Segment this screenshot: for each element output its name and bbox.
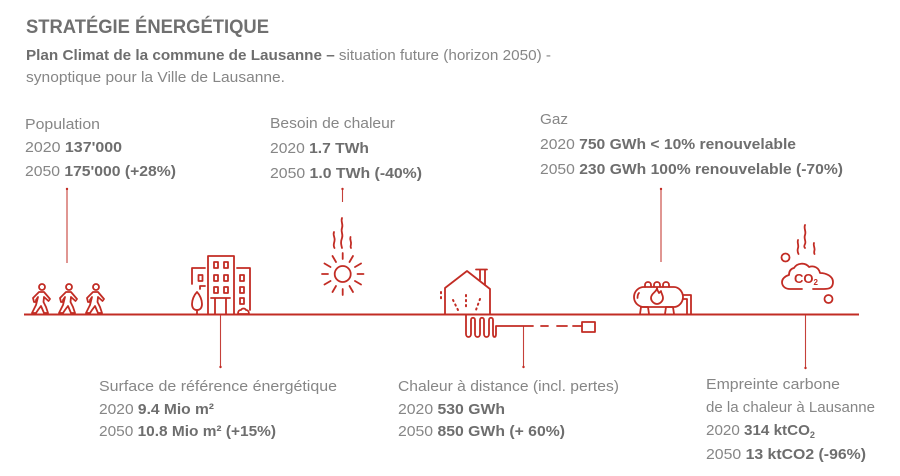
text block: chaleur à distance [398,378,619,440]
text block: chaleur à distance: Chaleur à distance (incl. pertes) [398,378,619,395]
text block: gaz: 2050 230 GWh 100% renouvelable (-70%) [540,161,843,178]
text block: empreinte carbone [706,376,875,463]
title: STRATÉGIE ÉNERGÉTIQUE [26,16,269,38]
text block: surface de référence énergétique: 2020 9.4 Mio m² [99,401,214,418]
icon: walker 2 [59,284,77,313]
text block: population: 2020 137'000 [25,139,122,156]
connector: empreinte carbone [804,315,807,369]
subtitle: Plan Climat de la commune de Lausanne – situation future (horizon 2050) - [26,47,551,64]
icon label: CO2: CO [794,271,814,286]
connector: besoin de chaleur [341,188,344,202]
baseline [24,314,859,316]
icon label: CO2: 2 [814,278,818,287]
connector: surface [219,315,222,368]
text block: surface de référence énergétique [99,378,337,440]
text block: besoin de chaleur [270,115,422,182]
icon: house [441,270,490,314]
text block: empreinte carbone: de la chaleur à Lausanne [706,399,875,416]
connector: population [66,188,68,263]
text block: empreinte carbone: 2 [810,430,815,440]
icon: walker 1 [32,284,50,313]
text block: besoin de chaleur: Besoin de chaleur [270,115,395,132]
icon: walker 3 [86,284,104,313]
text block: empreinte carbone: 2050 13 ktCO2 (-96%) [706,446,866,463]
connector: chaleur à distance [522,326,525,368]
text block: gaz: Gaz [540,111,568,128]
text block: chaleur à distance: 2050 850 GWh (+ 60%) [398,423,565,440]
connector: gaz [660,188,662,262]
text block: surface de référence énergétique: 2050 10.8 Mio m² (+15%) [99,423,276,440]
subtitle: synoptique pour la Ville de Lausanne. [26,69,285,86]
text block: besoin de chaleur: 2020 1.7 TWh [270,140,369,157]
subtitle [26,47,551,86]
text block: population: 2050 175'000 (+28%) [25,163,176,180]
text block: besoin de chaleur: 2050 1.0 TWh (-40%) [270,165,422,182]
text block: population: Population [25,116,100,133]
icon: walking people [32,284,104,313]
text block: chaleur à distance: 2020 530 GWh [398,401,505,418]
text block: gaz: 2020 750 GWh < 10% renouvelable [540,136,796,153]
icon: gas tank with flame [634,282,691,314]
text block: population [25,116,176,180]
text block: empreinte carbone: 2020 314 ktCO [706,422,809,439]
icon: buildings [192,256,250,314]
icon: heat coil and district pipe [466,315,595,337]
text block: surface de référence énergétique: Surface de référence énergétique [99,378,337,395]
icon: sun with heat waves [322,218,364,295]
text block: empreinte carbone: Empreinte carbone [706,376,840,393]
icon: CO2 cloud [782,225,833,303]
text block: gaz [540,111,843,178]
